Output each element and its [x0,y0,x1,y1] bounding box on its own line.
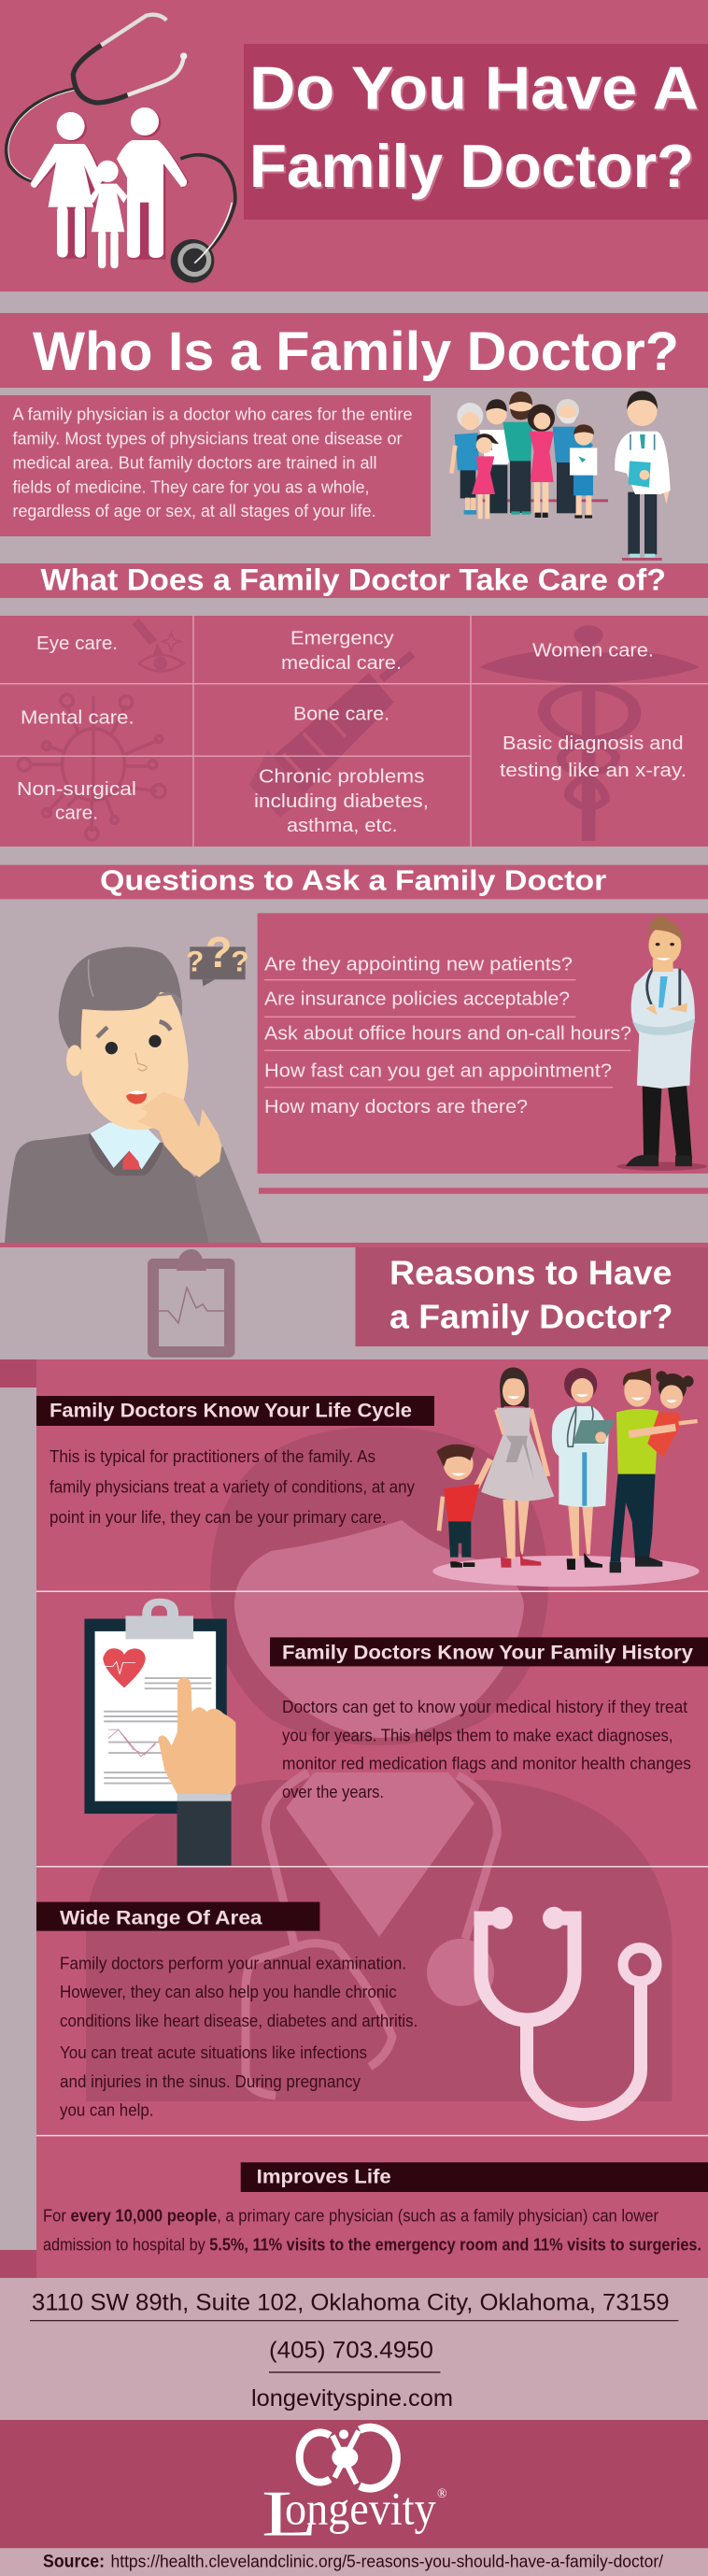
source line: Source: [43,2553,105,2572]
grid labels: Bone care. [293,704,389,724]
heading band: who is a family doctor: Who Is a Family Doctor? [33,321,679,382]
panel: definition text: medical area. But family doctors are trained in all [13,453,377,472]
block: life cycle: Family Doctors Know Your Life Cycle [50,1401,412,1422]
panel: contact details [0,2278,708,2420]
icon: stethoscope [481,1907,657,2114]
grid labels: including diabetes, [254,791,429,812]
child [629,1371,698,1458]
icon: question bubble [186,928,249,987]
icon: eye drop [133,619,184,671]
block: wide range of area: Wide Range Of Area [60,1908,262,1929]
father [610,1368,662,1573]
source line: https://health.clevelandclinic.org/5-reasons-you-should-have-a-family-doctor/ [110,2553,663,2571]
block: wide range of area: and injuries in the sinus. During pregnancy [60,2072,361,2091]
grid labels: Chronic problems [259,767,424,788]
watermark icons [18,619,413,840]
watermark: doctor [86,1427,673,2101]
heading box: reasons: a Family Doctor? [389,1298,673,1336]
panel: contact details: (405) 703.4950 [269,2337,433,2363]
block: improves life [43,2162,708,2254]
illustration: family with stethoscope [7,15,235,283]
dividers [36,1591,708,2136]
illustration: family with doctor [432,1367,700,1587]
header panel [0,0,708,292]
sidebar [0,1359,36,2278]
panel: questions [258,913,708,1194]
boy [570,424,597,519]
mother [481,1367,554,1568]
grid labels: testing like an x-ray. [500,761,687,781]
panel: logo [0,2420,708,2550]
question list: Ask about office hours and on-call hours? [264,1023,631,1045]
block: wide range of area [36,1902,418,2119]
grid labels: Women care. [532,641,654,662]
icon: virus [18,694,165,840]
icon: question bubble: ? [231,944,249,977]
block: family history: monitor red medication flags and monitor health changes [282,1755,691,1773]
girl [472,434,499,519]
grid labels: Non-surgical [17,779,136,800]
band under questions [0,1243,708,1247]
young man [479,399,514,513]
block: wide range of area: Family doctors perform your annual examination. [60,1955,406,1973]
block: life cycle: point in your life, they can be your primary care. [50,1508,387,1527]
block: family history: Family Doctors Know Your Family History [282,1642,693,1663]
mother [528,405,555,518]
title [249,54,699,200]
block: improves life: For every 10,000 people, a primary care physician (such as a family physician) can lower [43,2207,658,2226]
block: life cycle [36,1396,434,1527]
block: wide range of area: You can treat acute situations like infections [60,2043,367,2062]
block: family history: over the years. [282,1783,384,1801]
illustration: family group and doctor [451,391,671,561]
grid labels: asthma, etc. [287,816,398,836]
block: improves life: Improves Life [257,2167,391,2188]
heading band: questions to ask [0,864,708,899]
grid labels: care. [55,804,98,824]
illustration: thinking man [5,928,262,1243]
icon: caduceus [479,625,701,841]
block: wide range of area: However, they can also help you handle chronic [60,1983,397,2001]
block: family history [270,1637,708,1801]
logo wordmark: L [262,2478,318,2550]
question list: How fast can you get an appointment? [264,1060,612,1081]
doctor [552,1368,615,1570]
grid lines [0,616,708,847]
panel: contact details: 3110 SW 89th, Suite 102, Oklahoma City, Oklahoma, 73159 [32,2289,670,2315]
panel: definition text: A family physician is a doctor who cares for the entire [13,406,413,424]
block: wide range of area: you can help. [60,2100,153,2119]
panel: definition text [0,395,431,536]
logo wordmark: ® [437,2487,447,2501]
icon: question bubble: ? [186,944,204,977]
block: life cycle: This is typical for practitioners of the family. As [50,1447,375,1466]
icon: clipboard watermark [148,1249,235,1358]
grid labels: Mental care. [21,707,135,728]
panel: reasons [36,1359,708,2278]
illustration: standing doctor [616,916,707,1171]
question list: Are insurance policies acceptable? [264,988,570,1009]
grid labels: Eye care. [36,633,118,654]
icon: syringe [249,654,413,818]
panel: care grid [0,616,708,847]
heading band: what does a family doctor take care of: What Does a Family Doctor Take Care of? [41,563,666,597]
panel: definition text: fields of medicine. They care for you as a whole, [13,477,370,496]
grid labels [17,628,687,836]
block: wide range of area: conditions like heart disease, diabetes and arthritis. [60,2012,418,2030]
title: Do You Have A [249,54,699,122]
icon: heart [103,1648,146,1687]
title: Family Doctor? [249,132,694,200]
illustration: clipboard and hand [84,1599,235,1866]
grid labels: Basic diagnosis and [503,733,684,754]
question list [264,953,631,1117]
heading band: questions to ask: Questions to Ask a Family Doctor [100,864,606,897]
icon: infinity logo [300,2427,397,2488]
block: family history: Doctors can get to know your medical history if they treat [282,1698,687,1716]
grid labels: Emergency [290,628,394,648]
grandfather [553,399,593,513]
heading box: reasons: Reasons to Have [389,1253,673,1291]
grid labels: medical care. [281,653,402,674]
logo wordmark: ongevity [285,2483,436,2535]
panel: contact details: longevityspine.com [251,2385,453,2412]
heading box: reasons [355,1247,708,1346]
block: family history: you for years. This helps them to make exact diagnoses, [282,1726,673,1744]
question list: How many doctors are there? [264,1096,528,1117]
doctor [615,391,671,558]
question list: Are they appointing new patients? [264,953,573,975]
source line [0,2548,708,2576]
grandmother [451,403,483,515]
boy [436,1445,490,1568]
icon: question bubble: ? [205,928,232,976]
block: life cycle: family physicians treat a variety of conditions, at any [50,1477,415,1496]
title box [244,44,708,220]
bearded man [503,391,532,515]
panel: definition text: regardless of age or sex, at all stages of your life. [13,502,375,520]
panel: definition text: family. Most types of physicians treat one disease or [13,430,403,448]
